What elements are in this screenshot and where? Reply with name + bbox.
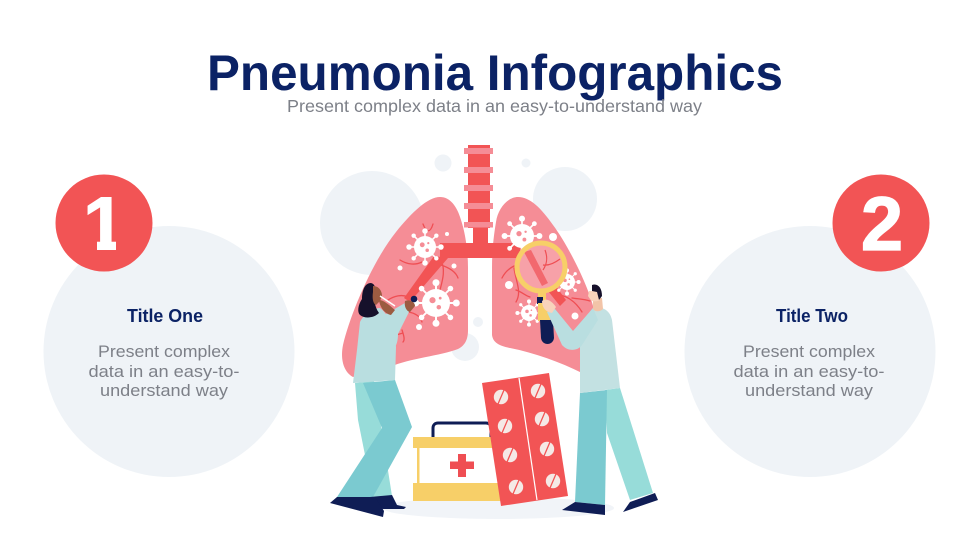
background blobs xyxy=(320,154,597,361)
woman doctor xyxy=(330,283,417,517)
right number badge xyxy=(832,174,930,272)
right card body text: data in an easy-to- xyxy=(734,362,884,381)
hair xyxy=(592,285,602,300)
hand xyxy=(405,300,415,312)
blood vessels xyxy=(388,224,590,342)
right card body text: understand way xyxy=(745,381,874,400)
man doctor xyxy=(542,285,658,515)
left card body text: Present complex xyxy=(98,342,231,361)
illustration: pneumonia lungs with doctors xyxy=(320,145,658,519)
sleeve xyxy=(383,303,409,353)
subtitle: Present complex data in an easy-to-understand way xyxy=(287,96,702,116)
hair xyxy=(358,283,379,317)
trachea and bronchi xyxy=(404,145,566,306)
back leg xyxy=(355,381,392,497)
left number badge: 1 xyxy=(83,182,125,267)
left card body text: data in an easy-to- xyxy=(88,362,240,381)
forearm xyxy=(379,300,395,315)
left card heading: Title One xyxy=(127,306,203,326)
arm xyxy=(547,308,598,350)
pill blister pack xyxy=(482,373,568,506)
left card body text xyxy=(88,342,240,400)
front shoe xyxy=(562,502,605,515)
first aid kit xyxy=(413,423,501,501)
left number badge xyxy=(56,174,152,272)
panel: right card xyxy=(684,174,936,477)
front leg xyxy=(575,390,607,505)
front leg xyxy=(337,380,412,497)
red cross xyxy=(450,454,474,477)
ground shadow xyxy=(382,497,614,519)
torso xyxy=(353,308,396,383)
right card heading: Title Two xyxy=(776,306,848,326)
panel: left card xyxy=(44,174,294,477)
right card background circle xyxy=(684,226,936,477)
left card background circle xyxy=(44,226,294,477)
face xyxy=(373,286,382,305)
right lung xyxy=(492,197,594,373)
hand xyxy=(542,300,556,313)
back shoe xyxy=(370,495,406,509)
right card body text: Present complex xyxy=(743,342,876,361)
back shoe xyxy=(623,493,658,512)
face xyxy=(588,291,600,301)
left card body text: understand way xyxy=(100,381,229,400)
title: Pneumonia Infographics xyxy=(207,45,783,101)
right card body text xyxy=(734,342,884,400)
torso xyxy=(574,308,620,393)
front shoe xyxy=(330,497,384,517)
magnifying glass xyxy=(517,243,565,344)
right number badge: 2 xyxy=(861,182,903,267)
trachea rings xyxy=(464,148,493,228)
neck xyxy=(593,298,603,311)
left lung xyxy=(342,197,468,377)
stethoscope xyxy=(411,296,417,302)
virus cells xyxy=(398,216,581,330)
back leg xyxy=(605,388,653,500)
